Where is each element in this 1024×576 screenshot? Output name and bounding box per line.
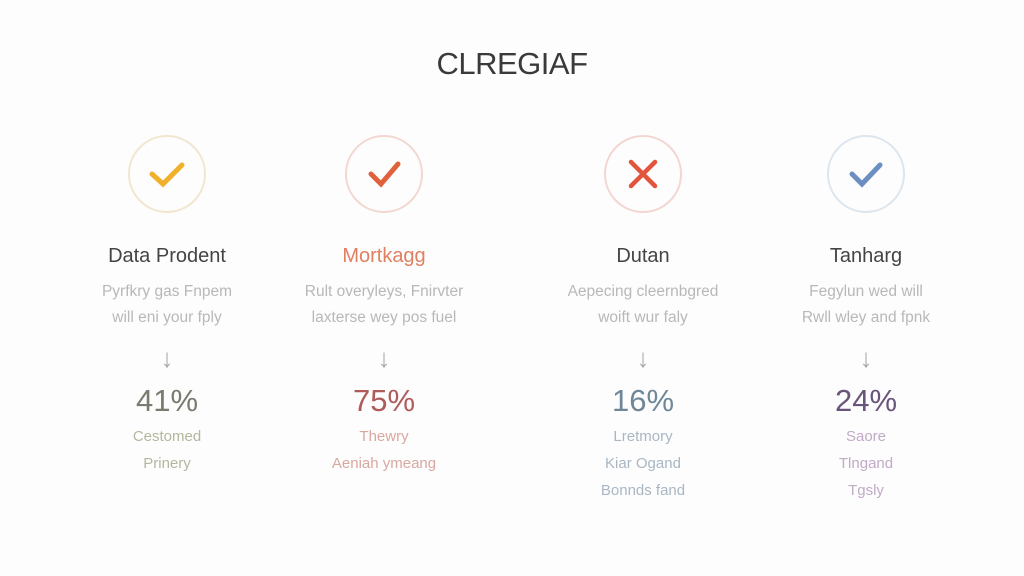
description: [802, 283, 930, 326]
arrow: ↓: [860, 343, 872, 373]
percentage: 24%: [835, 383, 897, 418]
sublabel: Tlngand: [839, 455, 893, 472]
sublabel: Aeniah ymeang: [332, 455, 436, 472]
sublabel: Tgsly: [848, 482, 884, 499]
description: Pyrfkry gas Fnpem: [102, 283, 232, 300]
description: Rult overyleys, Fnirvter: [305, 283, 463, 300]
sublabel: [133, 428, 201, 472]
sublabel: Saore: [846, 428, 886, 445]
icon: yellow check: [128, 135, 206, 213]
arrow: ↓: [160, 343, 174, 373]
sublabel: Cestomed: [133, 428, 201, 445]
percentage: 75%: [353, 383, 415, 418]
heading: Dutan: [616, 245, 670, 267]
description: woift wur faly: [598, 309, 688, 326]
icon: blue check: [827, 135, 905, 213]
panel: mortkagg: [305, 135, 463, 472]
description: Aepecing cleernbgred: [568, 283, 718, 300]
sublabel: Kiar Ogand: [605, 455, 681, 472]
heading: Mortkagg: [342, 245, 426, 267]
description: Fegylun wed will: [809, 283, 923, 300]
description: will eni your fply: [112, 309, 222, 326]
sublabel: [601, 428, 685, 499]
sublabel: Prinery: [143, 455, 191, 472]
sublabel: [839, 428, 893, 499]
description: laxterse wey pos fuel: [312, 309, 456, 326]
icon: orange check: [345, 135, 423, 213]
panel: tanharg: [802, 135, 930, 499]
sublabel: [332, 428, 436, 472]
heading: Tanharg: [830, 245, 902, 267]
description: [102, 283, 232, 326]
description: [568, 283, 718, 326]
sublabel: Thewry: [359, 428, 409, 445]
sublabel: Lretmory: [613, 428, 673, 445]
description: Rwll wley and fpnk: [802, 309, 930, 326]
heading: Data Prodent: [108, 245, 226, 267]
arrow: ↓: [378, 343, 390, 373]
title: CLREGIAF: [436, 46, 588, 81]
sublabel: Bonnds fand: [601, 482, 685, 499]
panel: data prodent: [102, 135, 232, 472]
panel: dutan: [568, 135, 718, 499]
icon: red x: [604, 135, 682, 213]
arrow: ↓: [636, 343, 650, 373]
percentage: 41%: [136, 383, 198, 418]
percentage: 16%: [612, 383, 674, 418]
description: [305, 283, 463, 326]
